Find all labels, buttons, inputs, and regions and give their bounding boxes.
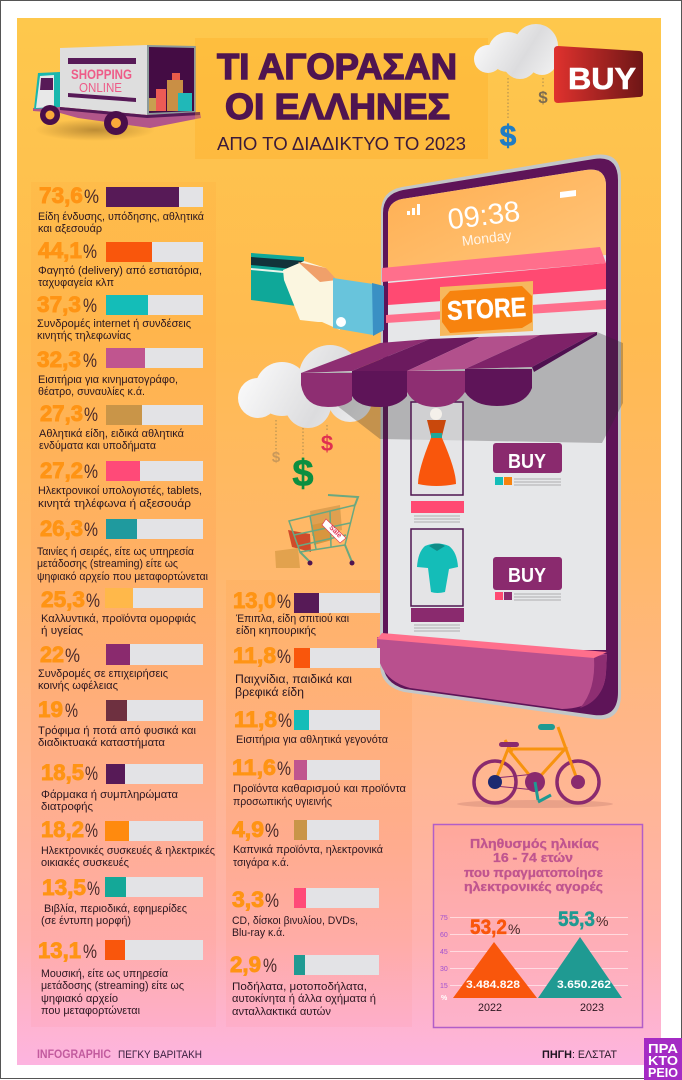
list item 37,3% <box>37 292 203 342</box>
footer source <box>542 1049 617 1061</box>
icon: shopping cart <box>275 495 358 568</box>
triangle 2022: 2022 <box>478 1002 502 1014</box>
triangle 2023: 3.650.262 <box>557 979 611 991</box>
triangle 2023: 2023 <box>580 1002 604 1014</box>
list item 13,1%: ψηφιακό αρχείο <box>41 993 118 1005</box>
subtitle: ΑΠΟ ΤΟ ΔΙΑΔΙΚΤΥΟ ΤΟ 2023 <box>217 134 466 154</box>
left list panel <box>31 182 216 1027</box>
footer source: ΠΗΓΗ <box>542 1049 572 1061</box>
panel: population statistics <box>434 824 642 1028</box>
list item 11,6% <box>232 755 407 808</box>
list item 18,2% <box>41 817 215 869</box>
list item 19%: % <box>65 701 78 722</box>
list item 37,3%: 37,3 <box>37 292 81 317</box>
product: shirt <box>411 529 464 631</box>
icon: lower cloud with dollars <box>238 345 372 495</box>
icon: BUY sign: BUY <box>568 61 636 96</box>
title block <box>195 38 488 159</box>
list item 4,9%: 4,9 <box>232 817 264 842</box>
list item 18,2%: % <box>85 821 98 842</box>
title line 2: ΟΙ ΕΛΛΗΝΕΣ <box>225 86 450 127</box>
list item 11,8% toys: βρεφικά είδη <box>235 685 304 699</box>
logo: ΠΡΑ <box>648 1041 679 1056</box>
list item 4,9% <box>232 817 384 869</box>
list item 32,3%: 32,3 <box>37 347 81 372</box>
list item 26,3%: 26,3 <box>40 516 83 541</box>
chart grid and axis: 15 <box>440 983 448 990</box>
list item 26,3% <box>37 516 209 583</box>
icon: delivery truck: SHOPPING <box>71 66 132 82</box>
product: dress <box>411 402 464 522</box>
list item 11,6%: Προϊόντα καθαρισμού και προϊόντα <box>233 783 407 795</box>
list item 19%: διαδικτυακά καταστήματα <box>38 737 166 749</box>
list item 13,1%: % <box>83 942 97 963</box>
chart grid and axis: % <box>441 995 448 1002</box>
list item 22% <box>38 642 203 692</box>
list item 73,6%: 73,6 <box>39 183 83 208</box>
list item 11,6%: % <box>277 759 291 780</box>
list item 2,9%: αυτοκίνητα ή άλλα οχήματα ή <box>232 993 376 1005</box>
chart grid and axis: 30 <box>440 966 448 973</box>
list item 19% <box>38 697 203 749</box>
list item 3,3%: 3,3 <box>232 887 264 912</box>
panel heading: ηλεκτρονικές αγορές <box>464 879 603 894</box>
icon: delivery truck: ONLINE <box>79 80 122 95</box>
list item 18,5%: 18,5 <box>41 760 84 785</box>
icon: BUY sign <box>554 46 643 103</box>
triangle 2023: 55,3 <box>558 908 595 931</box>
list item 73,6%: Είδη ένδυσης, υπόδησης, αθλητικά <box>38 211 205 223</box>
list item 44,1%: % <box>83 242 97 263</box>
list item 3,3%: CD, δίσκοι βινυλίου, DVDs, <box>232 915 358 927</box>
list item 4,9%: τσιγάρα κ.ά. <box>233 857 289 869</box>
icon: lower cloud with dollars: $ <box>292 453 314 495</box>
phone illustration <box>301 154 623 719</box>
list item 27,3%: Αθλητικά είδη, ειδικά αθλητικά <box>39 428 185 440</box>
clock: Monday <box>461 227 512 249</box>
list item 27,2%: % <box>84 462 98 483</box>
triangle 2023 <box>538 908 622 1014</box>
list item 19%: 19 <box>38 697 63 722</box>
list item 2,9%: ανταλλακτικά αυτών <box>232 1006 332 1018</box>
icon: lower cloud with dollars: $ <box>272 449 281 466</box>
list item 11,8% sports tickets: 11,8 <box>234 707 277 732</box>
list item 11,8% sports tickets <box>234 707 389 746</box>
list item 22%: Συνδρομές σε επιχειρήσεις <box>38 668 168 680</box>
list item 44,1%: Φαγητό (delivery) από εστιατόρια, <box>38 265 202 277</box>
list item 13,0%: Έπιπλα, είδη σπιτιού και <box>235 613 350 625</box>
list item 13,1%: Μουσική, είτε ως υπηρεσία <box>41 968 169 980</box>
list item 18,5%: διατροφής <box>41 801 93 813</box>
awning <box>301 332 597 407</box>
list item 13,5% <box>41 875 203 927</box>
icon: top cloud with dollars: $ <box>500 120 517 153</box>
chart grid and axis: 75 <box>440 915 448 922</box>
store sign <box>440 281 533 336</box>
chart grid and axis: 45 <box>440 949 448 956</box>
list item 27,3% <box>39 401 203 452</box>
list item 25,3% <box>41 587 203 637</box>
list item 11,8% sports tickets: Εισιτήρια για αθλητικά γεγονότα <box>236 734 389 746</box>
list item 13,5%: Βιβλία, περιοδικά, εφημερίδες <box>44 903 187 915</box>
list item 73,6%: και αξεσουάρ <box>38 223 102 235</box>
list item 11,6%: 11,6 <box>232 755 276 780</box>
triangle 2023: % <box>596 913 608 929</box>
list item 11,8% sports tickets: % <box>278 711 292 732</box>
list item 13,5%: % <box>87 879 100 900</box>
list item 3,3% <box>232 887 379 939</box>
list item 32,3%: θέατρο, συναυλίες κ.ά. <box>38 386 145 398</box>
awning shadow <box>301 332 623 443</box>
list item 27,2%: Ηλεκτρονικοί υπολογιστές, tablets, <box>38 485 202 497</box>
list item 2,9%: Ποδήλατα, μοτοποδήλατα, <box>232 981 367 993</box>
icon: top cloud with dollars <box>474 24 558 153</box>
triangle 2022: % <box>508 921 520 937</box>
store sign: STORE <box>446 292 527 326</box>
list item 3,3%: Blu-ray κ.ά. <box>232 927 285 939</box>
chart grid and axis: 60 <box>440 932 448 939</box>
icon: lower cloud with dollars: $ <box>321 431 333 456</box>
footer credit: ΠΕΓΚΥ ΒΑΡΙΤΑΚΗ <box>118 1049 202 1061</box>
list item 13,1%: που μεταφορτώνεται <box>41 1005 141 1017</box>
icon: hand with credit card <box>251 253 384 336</box>
list item 37,3%: κινητής τηλεφωνίας <box>37 330 131 342</box>
phone screen <box>388 170 606 650</box>
list item 2,9% <box>230 952 379 1018</box>
list item 18,2%: Ηλεκτρονικές συσκευές & ηλεκτρικές <box>41 845 215 857</box>
list item 44,1%: 44,1 <box>38 238 82 263</box>
list item 27,2%: κινητά τηλέφωνα ή αξεσουάρ <box>38 498 191 510</box>
phone body <box>380 154 621 719</box>
chart grid and axis <box>440 915 628 1002</box>
icon: top cloud with dollars: $ <box>538 88 548 107</box>
list item 4,9%: Καπνικά προϊόντα, ηλεκτρονικά <box>233 844 384 856</box>
panel heading <box>464 836 603 894</box>
phone base <box>377 633 607 709</box>
store front bands <box>382 247 606 323</box>
list item 25,3%: Καλλυντικά, προϊόντα ομορφιάς <box>41 613 196 625</box>
product: buy button 1: BUY <box>508 451 547 473</box>
list item 13,1% <box>38 938 203 1017</box>
list item 27,3%: % <box>84 405 98 426</box>
list item 32,3% <box>37 347 203 398</box>
list item 26,3%: μετάδοσης (streaming) είτε ως <box>37 558 178 570</box>
triangle 2022: 3.484.828 <box>466 979 520 991</box>
list item 22%: % <box>65 646 80 667</box>
list item 19%: Τρόφιμα ή ποτά από φυσικά και <box>38 725 197 737</box>
title line 1: ΤΙ ΑΓΟΡΑΣΑΝ <box>217 46 457 87</box>
list item 3,3%: % <box>265 891 279 912</box>
list item 13,5%: (σε έντυπη μορφή) <box>41 915 131 927</box>
logo: ΚΤΟ <box>648 1053 678 1068</box>
list item 37,3%: % <box>83 296 97 317</box>
list item 73,6% <box>38 183 205 235</box>
list item 2,9%: % <box>263 956 277 977</box>
list item 18,5%: Φάρμακα ή συμπληρώματα <box>41 789 179 801</box>
footer credit <box>37 1047 202 1061</box>
list item 18,5% <box>41 760 203 813</box>
list item 11,8% toys: 11,8 <box>233 643 276 668</box>
list item 22%: κοινής ωφέλειας <box>38 680 118 692</box>
list item 44,1%: ταχυφαγεία κλπ <box>38 277 114 289</box>
list item 25,3%: 25,3 <box>41 587 85 612</box>
list item 26,3%: Ταινίες ή σειρές, είτε ως υπηρεσία <box>37 546 195 558</box>
product: buy button 1 <box>493 443 562 485</box>
list item 44,1% <box>38 238 203 289</box>
list item 32,3%: Εισιτήρια για κινηματογράφο, <box>38 374 178 386</box>
panel heading: Πληθυσμός ηλικίας <box>470 836 599 851</box>
list item 26,3%: ψηφιακό αρχείο που μεταφορτώνεται <box>37 571 209 583</box>
list item 13,5%: 13,5 <box>42 875 86 900</box>
footer credit: INFOGRAPHIC <box>37 1047 111 1061</box>
list item 13,0%: είδη κηπουρικής <box>236 625 316 637</box>
list item 27,3%: 27,3 <box>40 401 83 426</box>
list item 22%: 22 <box>40 642 64 667</box>
list item 26,3%: % <box>84 520 98 541</box>
product: buy button 2 <box>493 557 562 600</box>
list item 2,9%: 2,9 <box>230 952 261 977</box>
list item 27,2%: 27,2 <box>40 458 83 483</box>
list item 27,3%: ενδύματα και υποδήματα <box>39 440 157 452</box>
list item 11,8% toys: Παιχνίδια, παιδικά και <box>235 672 352 686</box>
list item 18,2%: οικιακές συσκευές <box>41 857 129 869</box>
list item 37,3%: Συνδρομές internet ή συνδέσεις <box>37 318 191 330</box>
list item 13,1%: μετάδοσης (streaming) είτε ως <box>41 980 184 992</box>
icon: bicycle <box>457 724 613 808</box>
list item 32,3%: % <box>83 351 97 372</box>
status bar icons <box>407 190 576 215</box>
panel heading: που πραγματοποίησε <box>464 865 603 880</box>
triangle 2022: 53,2 <box>470 916 507 939</box>
list item 11,8% toys: % <box>277 647 291 668</box>
list item 11,6%: προσωπικής υγιεινής <box>233 796 332 808</box>
logo: ΡΕΙΟ <box>648 1065 678 1080</box>
right list panel <box>226 580 412 1027</box>
footer source: : ΕΛΣΤΑΤ <box>572 1049 617 1061</box>
list item 18,2%: 18,2 <box>41 817 84 842</box>
list item 25,3%: ή υγείας <box>41 625 83 637</box>
panel heading: 16 - 74 ετών <box>493 850 573 865</box>
icon: shopping cart: Sale <box>327 524 343 540</box>
icon: delivery truck <box>33 45 201 141</box>
product: buy button 2: BUY <box>508 565 547 587</box>
list item 13,1%: 13,1 <box>38 938 81 963</box>
list item 73,6%: % <box>84 187 99 208</box>
list item 13,0%: % <box>277 592 291 613</box>
list item 13,0% <box>233 588 380 637</box>
list item 27,2% <box>38 458 203 510</box>
triangle 2022 <box>453 916 537 1014</box>
list item 25,3%: % <box>86 591 100 612</box>
list item 11,8% toys <box>233 643 380 699</box>
list item 4,9%: % <box>265 821 279 842</box>
clock: 09:38 <box>446 196 522 236</box>
list item 18,5%: % <box>85 764 98 785</box>
list item 13,0%: 13,0 <box>233 588 276 613</box>
logo <box>644 1038 682 1080</box>
